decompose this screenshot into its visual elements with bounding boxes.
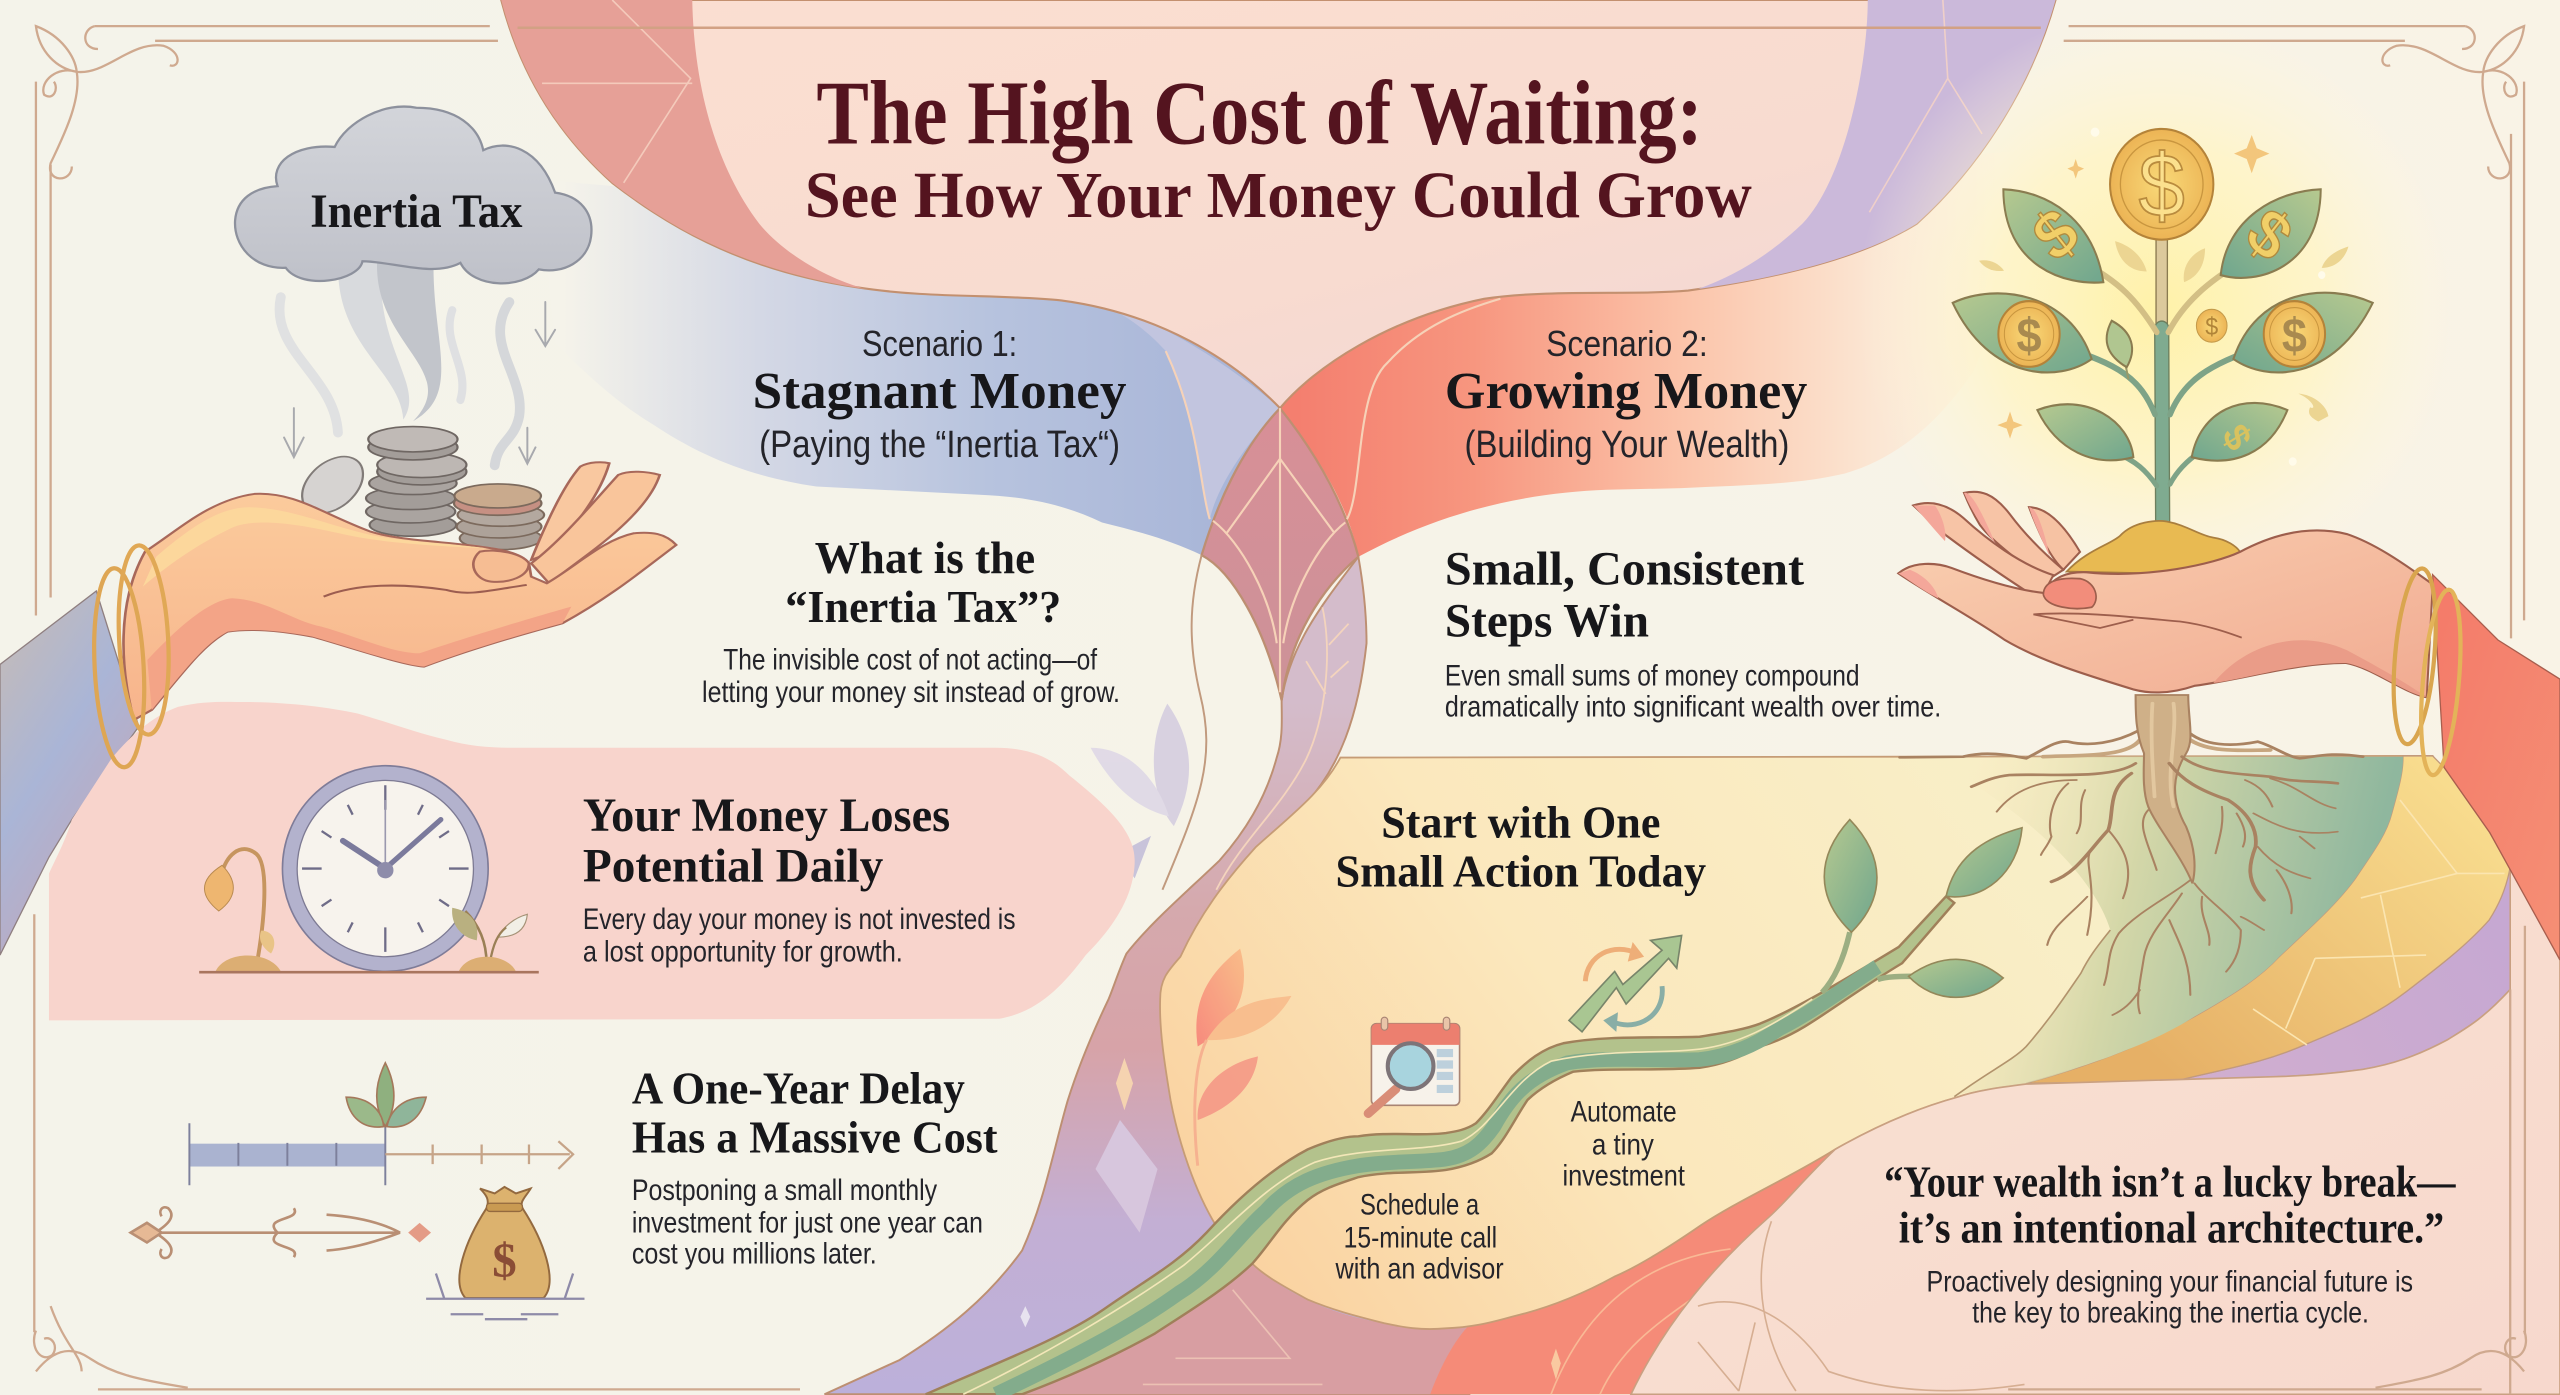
dollar coins: $ xyxy=(2282,308,2307,362)
label: schedule xyxy=(1335,1189,1504,1285)
label: automate: a tiny xyxy=(1592,1128,1654,1161)
icon: inertia tax cloud xyxy=(235,107,591,465)
text block: small consistent steps: Even small sums of money compound xyxy=(1445,660,1860,693)
icon: clock xyxy=(282,766,488,971)
dollar coins xyxy=(1998,129,2325,458)
fingers xyxy=(531,462,609,560)
palm shade xyxy=(2213,640,2427,697)
icon: sprout xyxy=(346,1063,426,1127)
band: green root field xyxy=(1927,757,2403,1097)
icon: ornate arrow xyxy=(131,1207,431,1258)
rose left fold xyxy=(501,0,865,289)
quote text: Proactively designing your financial future is xyxy=(1927,1265,2413,1298)
quote background xyxy=(1631,867,2560,1394)
label: schedule: Schedule a xyxy=(1360,1189,1480,1222)
cloud label: Inertia Tax xyxy=(310,186,523,238)
label: automate xyxy=(1562,1096,1685,1192)
heading xyxy=(1336,797,1706,897)
icon: coins and left hand xyxy=(123,427,676,720)
dollar coins: $ xyxy=(2019,193,2092,275)
sparkles xyxy=(1997,135,2269,439)
title xyxy=(805,63,1752,232)
soil mound xyxy=(2067,521,2240,574)
vine branch and leaves xyxy=(1822,820,2022,997)
panel text: A One-Year Delay xyxy=(632,1063,965,1114)
cloud body xyxy=(235,107,591,283)
thumb nail xyxy=(2043,578,2096,609)
title: The High Cost of Waiting: xyxy=(816,63,1703,164)
band: gold fold xyxy=(2026,756,2510,1083)
smoke wisps xyxy=(279,245,555,465)
icon: sprout right xyxy=(452,908,527,971)
panel text: investment for just one year can xyxy=(632,1207,983,1240)
icon: wilted plant left xyxy=(204,849,281,971)
decorative frame top-right xyxy=(2064,26,2524,638)
leaning coin xyxy=(290,449,376,521)
dollar coins: $ xyxy=(2205,313,2219,341)
scenario 1 label: Stagnant Money xyxy=(753,362,1127,420)
text block: what is the inertia tax: What is the xyxy=(815,532,1035,583)
label: automate: Automate xyxy=(1571,1096,1677,1129)
palm crease xyxy=(324,585,527,597)
rose lower triangle field xyxy=(1022,1257,1476,1394)
dollar coins: $ xyxy=(2017,308,2042,362)
panel: title ribbon xyxy=(501,0,2056,408)
scenario 1 label: (Paying the “Inertia Tax“) xyxy=(759,423,1120,465)
small gold leaves xyxy=(1979,241,2348,422)
dollar coins: $ xyxy=(2214,417,2259,458)
scenario 1 label: Scenario 1: xyxy=(862,323,1017,364)
palm highlight xyxy=(143,507,487,587)
panel text: Has a Massive Cost xyxy=(632,1112,998,1163)
decoration: gem and star xyxy=(1020,1058,1158,1327)
lilac right fold xyxy=(1698,0,2056,289)
dollar coins: $ xyxy=(2139,136,2185,236)
icon: right bangles xyxy=(2387,567,2467,777)
root trunk xyxy=(2136,695,2195,883)
panel text: cost you millions later. xyxy=(632,1238,877,1271)
back fingers xyxy=(2029,507,2080,570)
icon: right sleeve xyxy=(2433,575,2560,960)
stems xyxy=(2060,238,2263,534)
panel text: Your Money Loses xyxy=(583,790,950,842)
icon: plant glow xyxy=(1856,8,2460,612)
lilac lower band xyxy=(824,557,1469,1394)
decorative frame bottom-left xyxy=(34,914,800,1389)
icon: automate arrow xyxy=(1569,936,1682,1032)
palm crease xyxy=(2033,613,2242,638)
label: schedule: with an advisor xyxy=(1335,1252,1504,1285)
ground line xyxy=(199,971,539,973)
panel: central weave xyxy=(824,299,1500,1394)
icon: calendar with magnifier xyxy=(1368,1017,1460,1113)
palm xyxy=(1898,531,2433,697)
textured lilac strip xyxy=(1100,305,1280,519)
band: salmon lower sweep xyxy=(1430,1120,1886,1394)
panel: money loses potential xyxy=(49,702,1135,1020)
panel text: Potential Daily xyxy=(583,841,884,893)
icon: money bag: $ xyxy=(492,1233,517,1288)
decorative frame top-left xyxy=(36,26,498,616)
scenario 2 label xyxy=(1445,323,1807,465)
icon: money plant and right hand xyxy=(1898,128,2433,697)
text block: small consistent steps: Steps Win xyxy=(1445,596,1649,648)
title: See How Your Money Could Grow xyxy=(805,160,1752,232)
heading: Small Action Today xyxy=(1336,846,1706,897)
text block: what is the inertia tax: “Inertia Tax”? xyxy=(785,581,1061,632)
scenario 2 label: Scenario 2: xyxy=(1546,323,1708,364)
growth ribbon vine xyxy=(926,820,2022,1394)
panel text xyxy=(632,1063,998,1271)
heading: Start with One xyxy=(1381,797,1660,848)
band: purple fold xyxy=(2173,867,2510,1082)
decoration: lavender leaves xyxy=(1091,704,1189,878)
text block: what is the inertia tax xyxy=(702,532,1120,709)
panel: start with one small action xyxy=(926,756,2510,1394)
panel text: Postponing a small monthly xyxy=(632,1174,937,1207)
decorative frame bottom-right xyxy=(2008,926,2526,1394)
panel text: Every day your money is not invested is xyxy=(583,903,1016,936)
rose leaf lens xyxy=(1202,408,1358,700)
palm xyxy=(123,494,676,720)
icon: money bag xyxy=(459,1187,550,1298)
panel text xyxy=(583,790,1016,969)
decoration: coral leaves xyxy=(1195,949,1291,1166)
quote text: “Your wealth isn’t a lucky break— xyxy=(1884,1158,2456,1207)
text block: small consistent steps: Small, Consistent xyxy=(1445,543,1804,595)
palm shade xyxy=(147,598,571,710)
text block: what is the inertia tax: letting your money sit instead of grow. xyxy=(702,676,1120,709)
icon: four-point star xyxy=(1551,1349,1561,1380)
quote text: the key to breaking the inertia cycle. xyxy=(1972,1296,2369,1329)
scenario 1 label xyxy=(753,323,1127,465)
leaves xyxy=(1953,189,2373,461)
panel: quote xyxy=(1631,867,2560,1394)
icon: water lines xyxy=(426,1273,584,1319)
cream to yellow panel xyxy=(1160,756,2509,1329)
ribbon body xyxy=(501,0,2056,408)
silver stack xyxy=(366,427,466,536)
scenario 2 label: Growing Money xyxy=(1445,362,1807,420)
quote text xyxy=(1884,1158,2456,1329)
panel text: a lost opportunity for growth. xyxy=(583,936,903,969)
icon: timeline bar xyxy=(189,1110,573,1185)
icon: left bangles xyxy=(90,544,173,768)
panel: one-year delay xyxy=(131,1063,998,1319)
thumb xyxy=(473,551,529,582)
text block: small consistent steps xyxy=(1445,543,1941,724)
scenario 2 label: (Building Your Wealth) xyxy=(1464,423,1789,465)
label: schedule: 15-minute call xyxy=(1344,1221,1497,1254)
icon: left sleeve xyxy=(0,591,139,955)
scenario 2 salmon band xyxy=(1280,147,2065,557)
pink panel background xyxy=(49,702,1135,1020)
text block: what is the inertia tax: The invisible cost of not acting—of xyxy=(723,643,1098,676)
icon: tree roots xyxy=(1900,695,2363,1015)
panel: scenario 1 xyxy=(539,180,1280,555)
quote text: it’s an intentional architecture.” xyxy=(1899,1203,2444,1252)
dollar coins: $ xyxy=(2233,193,2306,275)
scenario 1 blue band xyxy=(539,180,1280,555)
label: automate: investment xyxy=(1562,1159,1685,1192)
copper stack xyxy=(454,484,544,550)
text block: small consistent steps: dramatically into significant wealth over time. xyxy=(1445,691,1941,724)
panel: scenario 2 xyxy=(1280,147,2065,557)
